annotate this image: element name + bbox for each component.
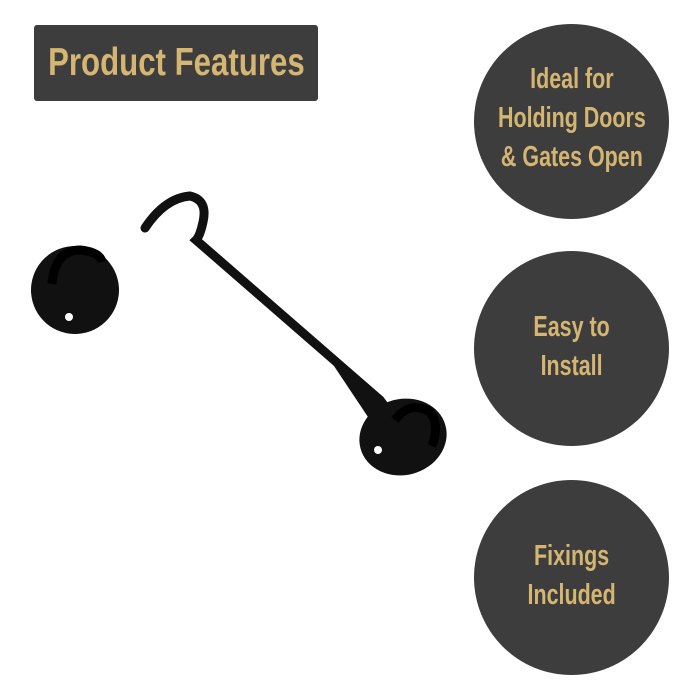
feature circle 1 xyxy=(474,24,669,219)
feature circle 1: Ideal for xyxy=(530,63,613,95)
feature circle 2: Install xyxy=(540,350,602,382)
feature circle 3 xyxy=(474,480,669,675)
hook bar xyxy=(145,196,400,430)
feature circle 2 xyxy=(474,251,669,446)
title: Product Features xyxy=(48,41,304,84)
feature circle 2: Easy to xyxy=(533,310,610,342)
feature circle 3: Fixings xyxy=(534,540,609,572)
feature circle 3: Included xyxy=(527,578,616,610)
feature circle 1: Holding Doors xyxy=(498,102,645,134)
right eye plate xyxy=(351,389,455,485)
title xyxy=(34,25,318,101)
feature circle 1: & Gates Open xyxy=(501,141,642,173)
left eye plate xyxy=(21,236,129,344)
